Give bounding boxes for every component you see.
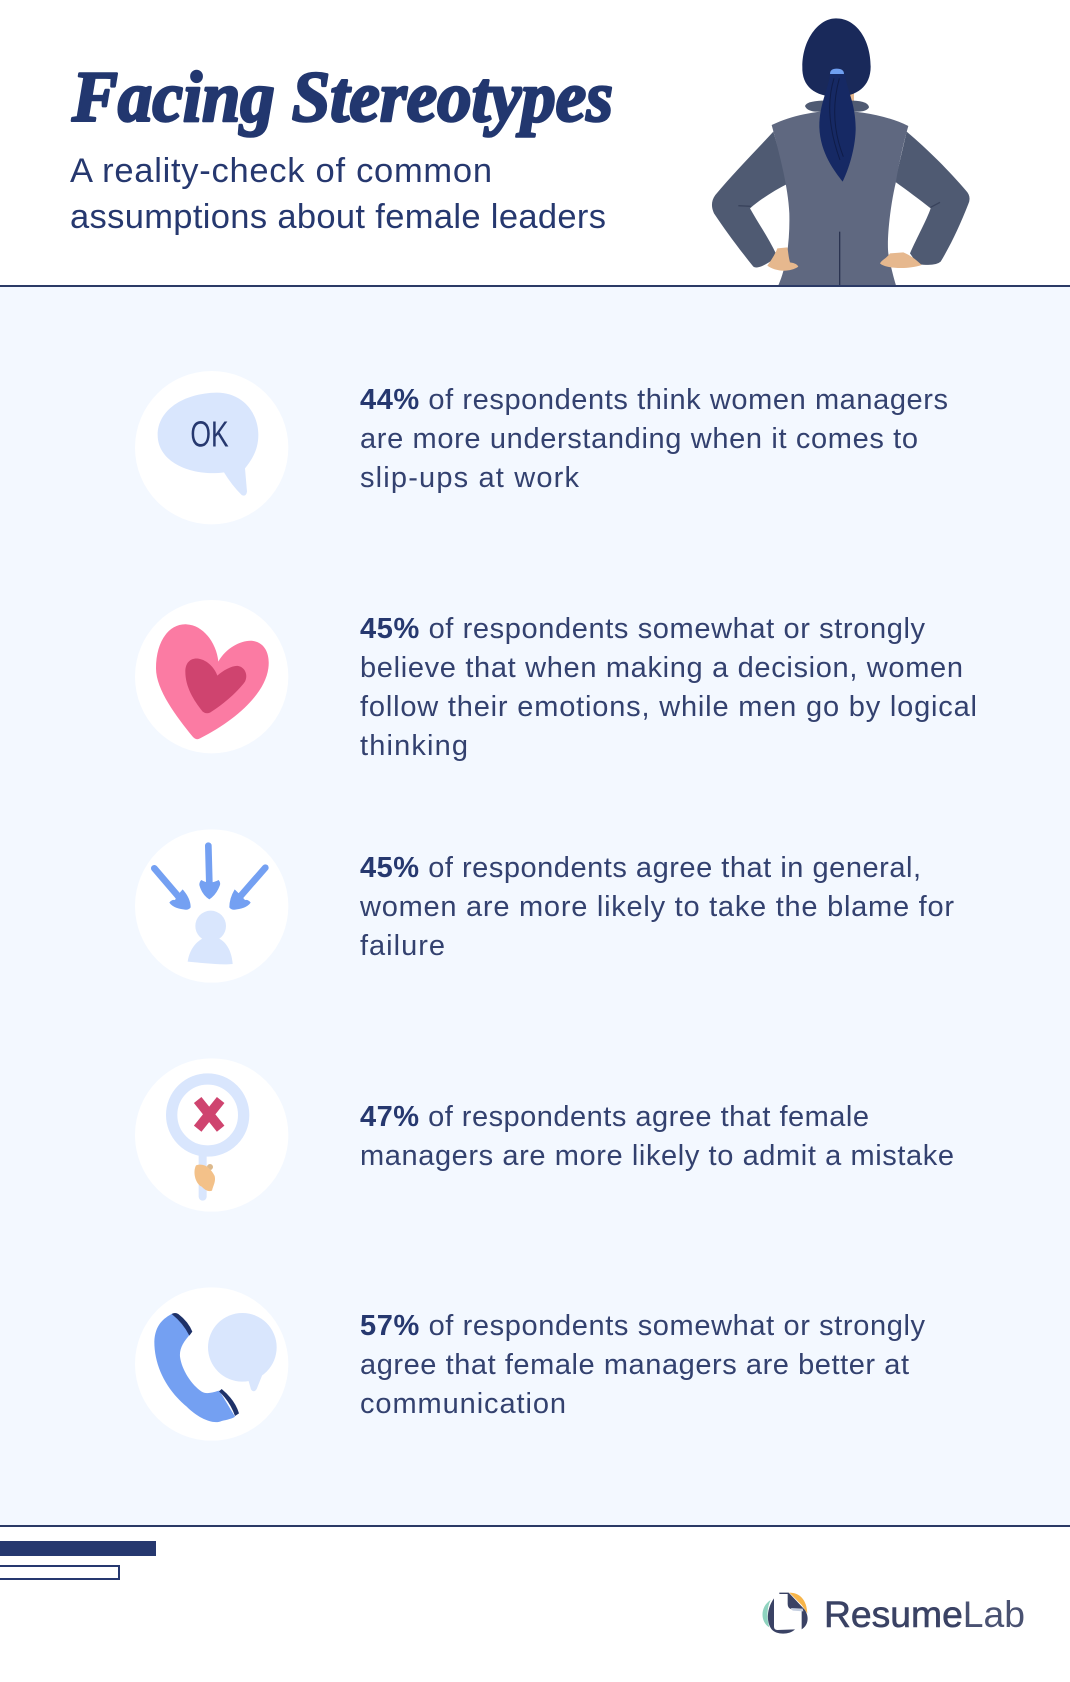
footer accent bars — [0, 1541, 156, 1579]
text: 45% blame statistic: failure — [360, 930, 445, 962]
text: 45% emotions statistic: thinking — [360, 730, 468, 762]
text: 44% statistic: 44% of respondents think women managers — [360, 384, 948, 416]
subtitle: A reality-check of common — [70, 152, 492, 190]
illustration: woman from behind with hands on hips — [712, 18, 970, 285]
panel: row 2 emotions — [135, 600, 977, 762]
text: 57% statistic: agree that female managers are better at — [360, 1349, 909, 1381]
logo: ResumeLab — [762, 1593, 1025, 1635]
panel: row 4 mistake — [135, 1058, 954, 1212]
divider: header line — [0, 285, 1070, 287]
text: 47% statistic: 47% of respondents agree that female — [360, 1101, 869, 1133]
text: 45% blame statistic: women are more likely to take the blame for — [359, 891, 954, 923]
text: 47% statistic — [360, 1101, 954, 1172]
text: 45% emotions statistic: follow their emotions, while men go by logical — [360, 691, 977, 723]
text: 47% statistic: managers are more likely to admit a mistake — [360, 1140, 954, 1172]
text: 57% statistic: 57% of respondents somewhat or strongly — [360, 1310, 926, 1342]
panel: light blue content background — [0, 286, 1070, 1526]
text: 44% statistic: are more understanding when it comes to — [360, 423, 918, 455]
panel: row 5 communication — [135, 1287, 925, 1441]
text: 45% blame statistic — [359, 852, 954, 962]
icon: OK speech bubble: OK — [190, 414, 229, 455]
icon: heart — [135, 600, 288, 753]
icon: arrows pointing at person — [135, 829, 288, 983]
icon: telephone and speech bubble — [135, 1287, 288, 1441]
panel: row 3 blame — [135, 829, 954, 983]
text: 45% emotions statistic: believe that when making a decision, women — [360, 652, 963, 684]
text: 44% statistic: slip-ups at work — [360, 462, 580, 494]
text: 45% blame statistic: 45% of respondents agree that in general, — [360, 852, 921, 884]
subtitle — [70, 152, 606, 236]
panel: row 1 understanding — [135, 371, 948, 524]
icon: ResumeLab mark — [762, 1593, 808, 1634]
text: 45% emotions statistic — [360, 613, 977, 762]
divider: footer line — [0, 1525, 1070, 1527]
text: 44% statistic — [360, 384, 948, 494]
text: 57% statistic — [360, 1310, 926, 1420]
header — [70, 18, 970, 285]
icon: sign with X held in hand — [135, 1058, 288, 1212]
text: brand name: ResumeLab — [824, 1594, 1025, 1635]
text: 57% statistic: communication — [360, 1388, 566, 1420]
title: Facing Stereotypes — [71, 57, 613, 137]
icon: OK speech bubble — [135, 371, 288, 524]
subtitle: assumptions about female leaders — [70, 198, 606, 236]
text: 45% emotions statistic: 45% of respondents somewhat or strongly — [360, 613, 926, 645]
